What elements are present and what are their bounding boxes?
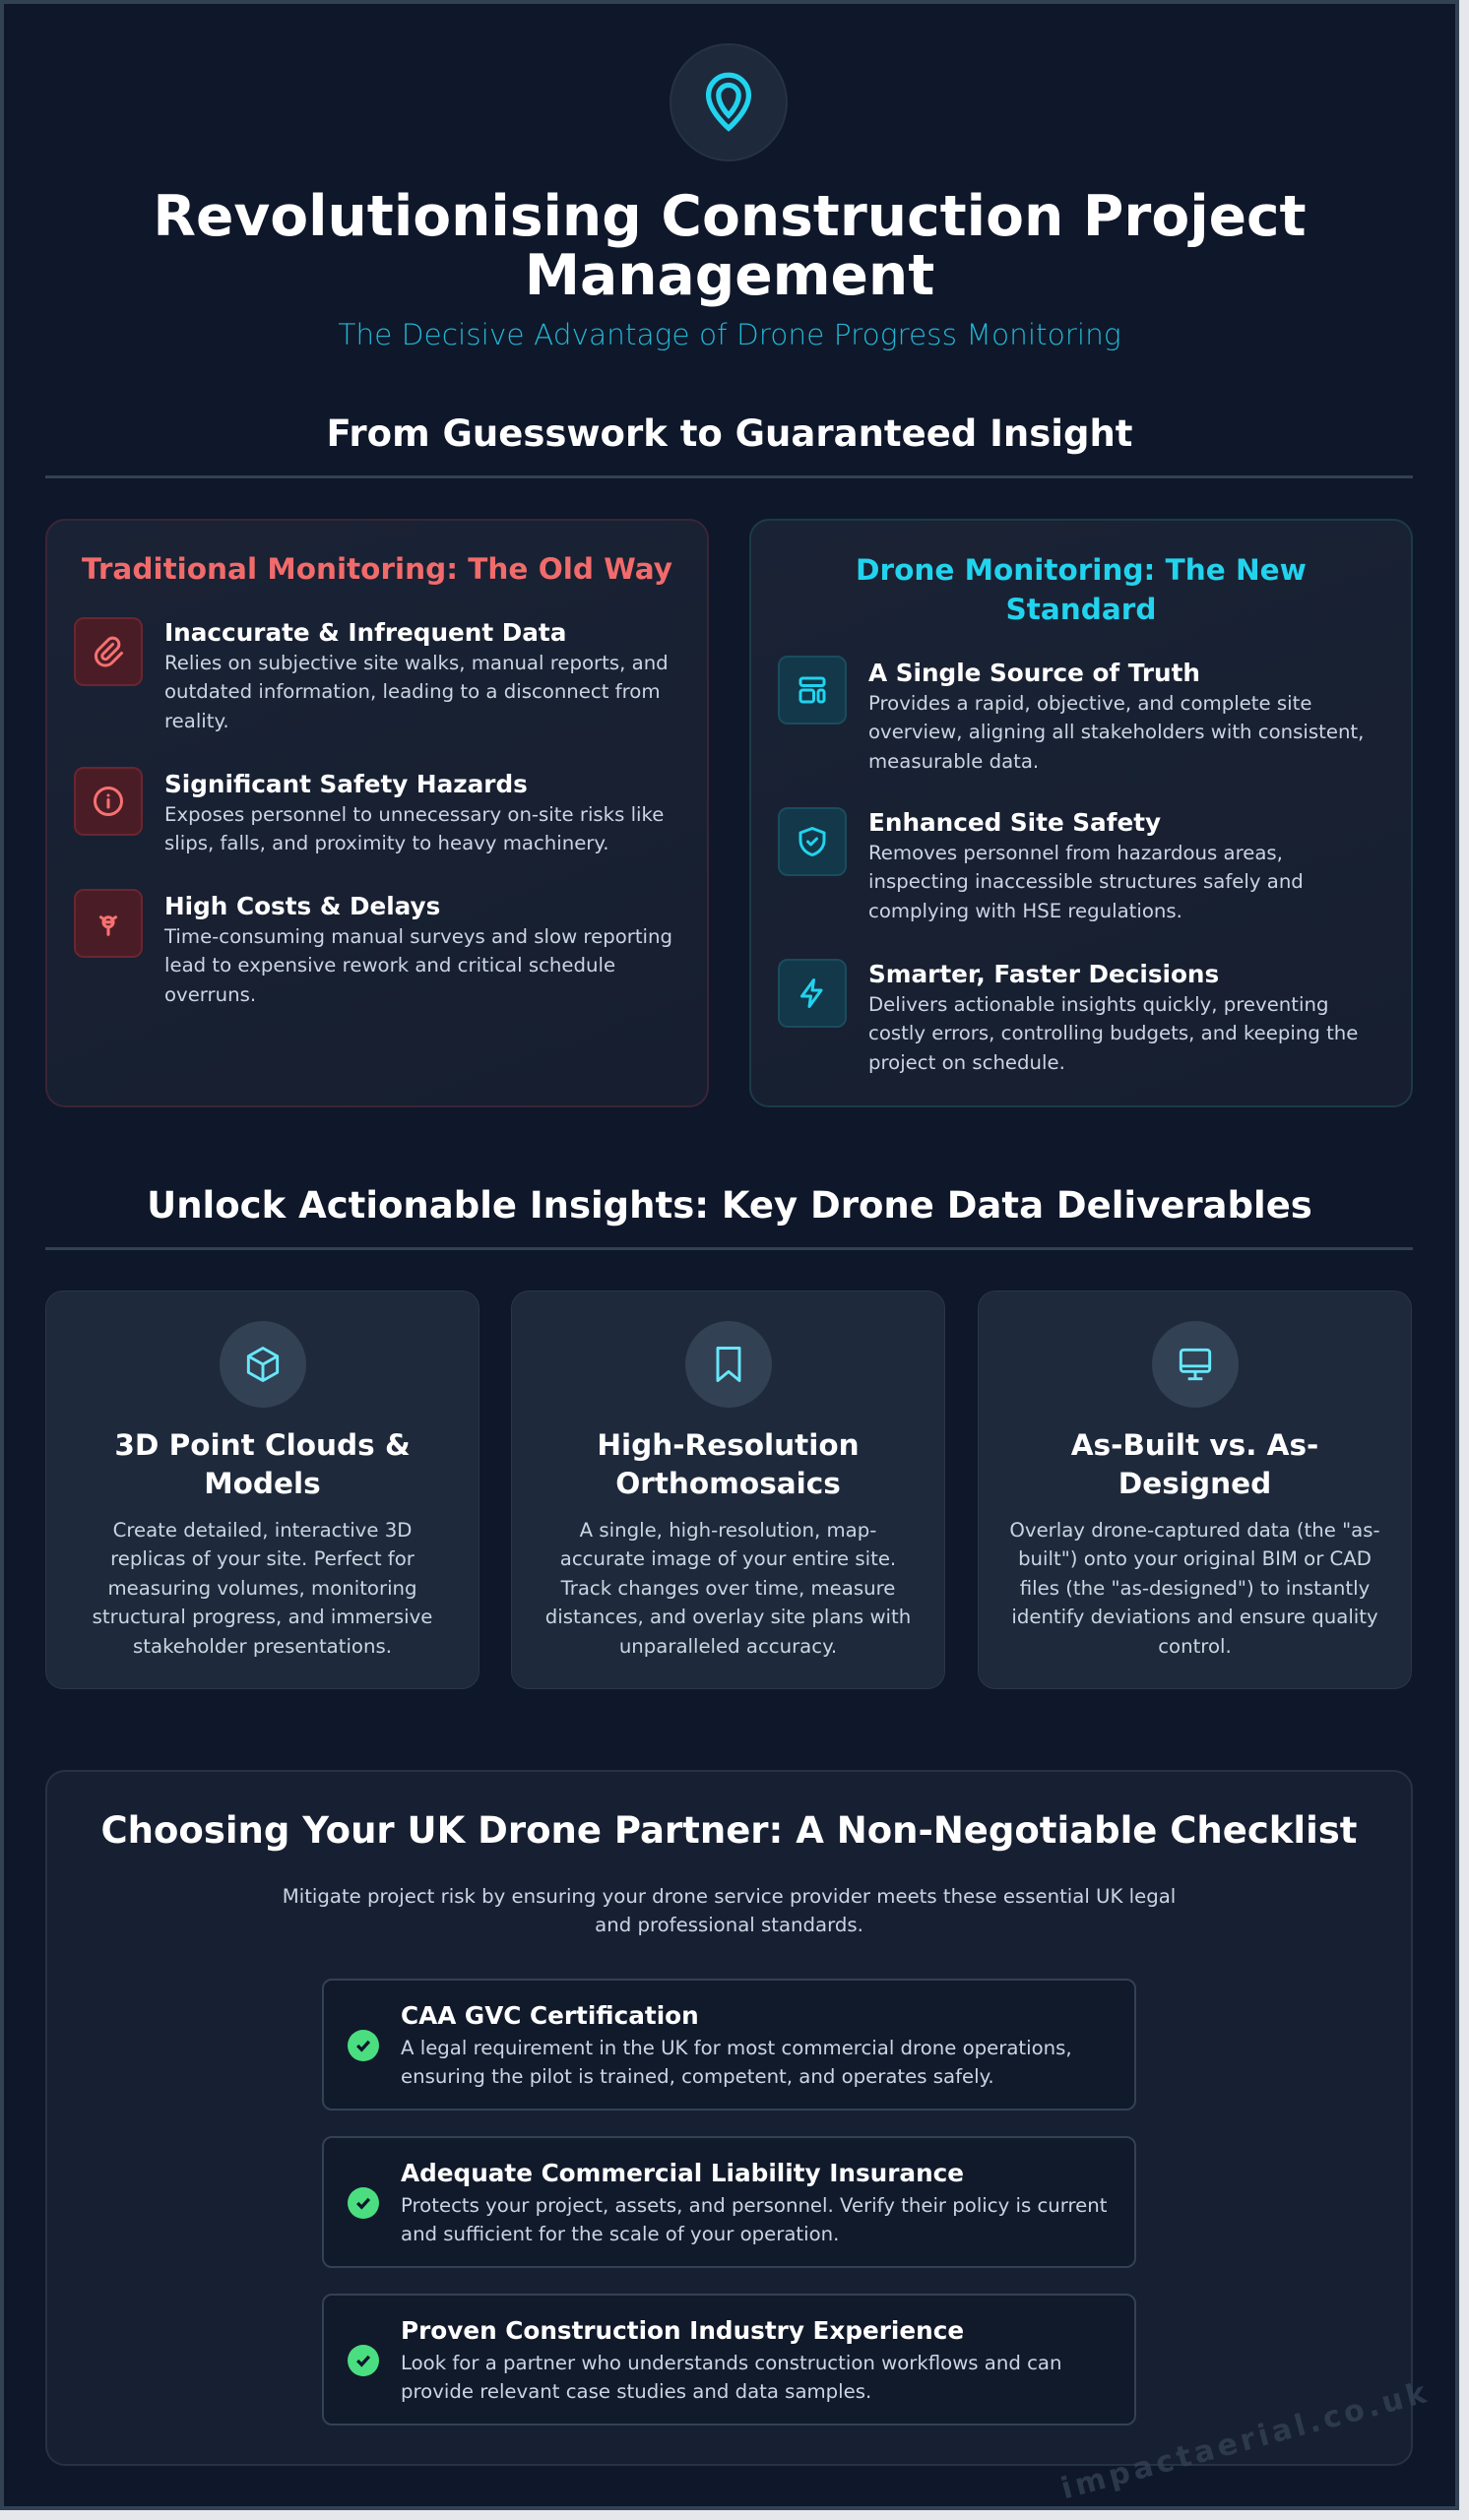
card: orthomosaics: High-Resolution Orthomosaics bbox=[597, 1428, 860, 1500]
heading: new standard: Standard bbox=[1006, 593, 1156, 626]
heading: checklist: Choosing Your UK Drone Partner: A Non-Negotiable Checklist bbox=[101, 1809, 1357, 1852]
panel: drone monitoring bbox=[749, 519, 1413, 1107]
checklist item: insurance: Adequate Commercial Liability Insurance bbox=[401, 2159, 964, 2187]
text: safety hazards: Significant Safety Hazards bbox=[164, 770, 528, 798]
text: costs: High Costs & Delays bbox=[164, 892, 440, 920]
checklist item: insurance: Protects your project, assets, and personnel. Verify their policy is current and sufficient for the scale of your operation. bbox=[401, 2194, 1107, 2245]
icon: paperclip bbox=[74, 617, 143, 686]
checklist item: CAA bbox=[322, 1979, 1136, 2110]
text: inaccurate data: Inaccurate & Infrequent Data bbox=[164, 618, 566, 647]
text: faster decisions: Smarter, Faster Decisions bbox=[868, 960, 1219, 988]
panel: checklist bbox=[45, 1770, 1413, 2466]
title: Revolutionising Construction Project Management bbox=[153, 184, 1307, 308]
panel: traditional monitoring: Exposes personnel to unnecessary on-site risks like slips, falls, and proximity to heavy machinery. bbox=[164, 803, 664, 854]
card: orthomosaics bbox=[511, 1291, 945, 1689]
intro text: Mitigate project risk by ensuring your drone service provider meets these essential UK legal and professional standards. bbox=[283, 1885, 1176, 1936]
card: as-built bbox=[978, 1291, 1412, 1689]
checklist item: CAA: A legal requirement in the UK for most commercial drone operations, ensuring the pilot is trained, competent, and operates safely. bbox=[401, 2037, 1072, 2088]
checklist item: experience: Look for a partner who understands construction workflows and can provide relevant case studies and data samples. bbox=[401, 2352, 1061, 2403]
panel: drone monitoring: Removes personnel from hazardous areas, inspecting inaccessible structures safely and complying with HSE regulations. bbox=[868, 842, 1304, 922]
checklist item: experience bbox=[322, 2294, 1136, 2426]
panel: traditional monitoring: Relies on subjective site walks, manual reports, and outdated information, leading to a disconnect from reality. bbox=[164, 652, 669, 732]
icon: bug bbox=[74, 889, 143, 958]
card: 3D point clouds: 3D Point Clouds & Models bbox=[114, 1428, 411, 1500]
card: 3D point clouds: Create detailed, interactive 3D replicas of your site. Perfect for measuring volumes, monitoring structural progress, and immersive stakeholder presentations. bbox=[93, 1519, 432, 1658]
heading: From Guesswork: From Guesswork to Guaranteed Insight bbox=[327, 412, 1132, 455]
icon: layout bbox=[778, 656, 847, 724]
icon: location pin bbox=[670, 43, 788, 161]
checklist item: experience: Proven Construction Industry Experience bbox=[401, 2316, 964, 2345]
icon: shield bbox=[778, 807, 847, 876]
subtitle: The Decisive Advantage of Drone Progress Monitoring bbox=[338, 318, 1121, 351]
text: site safety: Enhanced Site Safety bbox=[868, 808, 1161, 837]
card: as-built: As-Built vs. As-Designed bbox=[1071, 1428, 1318, 1500]
checklist item: CAA: CAA GVC Certification bbox=[401, 2001, 699, 2030]
icon: info bbox=[74, 767, 143, 836]
heading: deliverables: Unlock Actionable Insights: Key Drone Data Deliverables bbox=[147, 1184, 1312, 1227]
icon: bolt bbox=[778, 959, 847, 1028]
panel: traditional monitoring: Time-consuming manual surveys and slow reporting lead to expensive rework and critical schedule overruns. bbox=[164, 925, 672, 1006]
card: 3D point clouds bbox=[45, 1291, 479, 1689]
checklist item: insurance bbox=[322, 2136, 1136, 2268]
watermark: impactaerial.co.uk bbox=[1057, 2375, 1434, 2506]
icon: monitor bbox=[1152, 1321, 1239, 1408]
panel: traditional monitoring bbox=[45, 519, 709, 1107]
text: single source: A Single Source of Truth bbox=[868, 659, 1200, 687]
icon: cube bbox=[220, 1321, 306, 1408]
panel: drone monitoring: Provides a rapid, objective, and complete site overview, aligning all stakeholders with consistent, measurable data. bbox=[868, 692, 1364, 773]
card: as-built: Overlay drone-captured data (the "as-built") onto your original BIM or CAD files (the "as-designed") to instantly identify deviations and ensure quality control. bbox=[1009, 1519, 1380, 1658]
heading: new standard bbox=[856, 553, 1307, 626]
heading: old way: Traditional Monitoring: The Old Way bbox=[82, 552, 672, 586]
panel: drone monitoring: Delivers actionable insights quickly, preventing costly errors, controlling budgets, and keeping the project on schedule. bbox=[868, 993, 1358, 1074]
icon: bookmark bbox=[685, 1321, 772, 1408]
heading: new standard: Drone Monitoring: The New bbox=[856, 553, 1307, 587]
card: orthomosaics: A single, high-resolution, map-accurate image of your entire site. Track changes over time, measure distances, and overlay site plans with unparalleled accuracy. bbox=[545, 1519, 911, 1658]
